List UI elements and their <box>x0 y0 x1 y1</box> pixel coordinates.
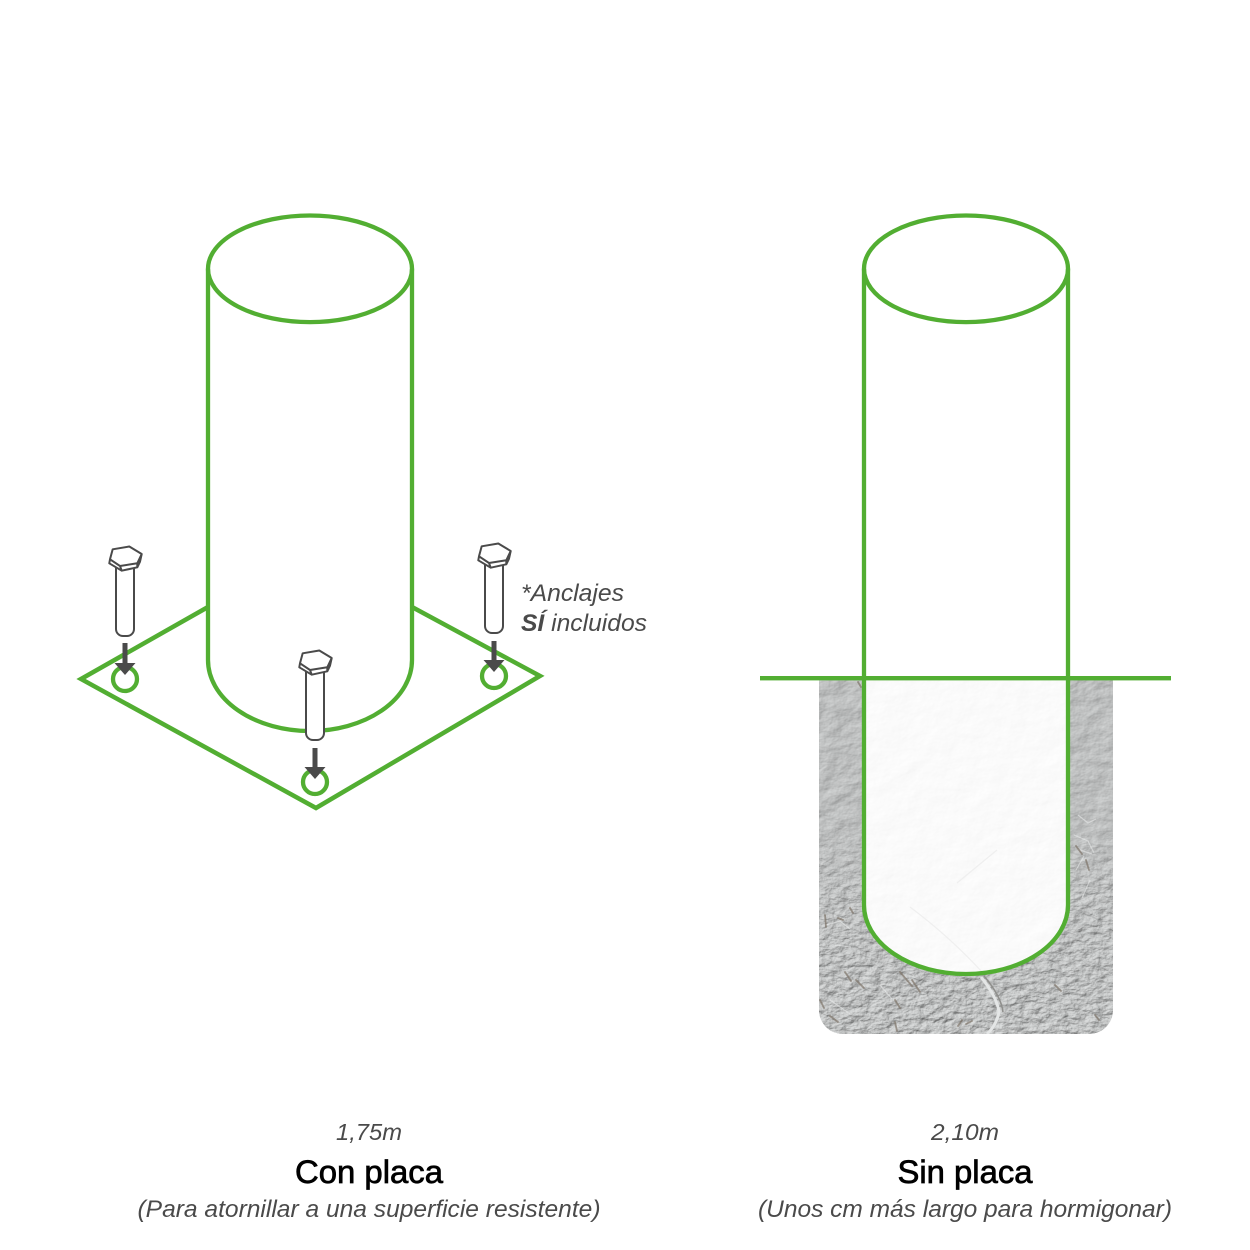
caption: con placa: 1,75m <box>336 1119 402 1145</box>
anchor hole: left <box>113 667 137 691</box>
caption: con placa: Con placa <box>295 1154 443 1190</box>
caption: con placa <box>138 1119 600 1223</box>
icon: bolt right <box>478 544 511 633</box>
caption: sin placa: Sin placa <box>898 1154 1033 1190</box>
caption: con placa: (Para atornillar a una superficie resistente) <box>138 1196 600 1223</box>
caption: sin placa: (Unos cm más largo para hormigonar) <box>758 1196 1172 1223</box>
icon: bolt left <box>109 546 142 636</box>
panel: sin placa <box>760 215 1171 1036</box>
arrow: centre <box>304 748 326 779</box>
anchor hole: right <box>482 664 506 688</box>
anchor hole: centre <box>303 770 327 794</box>
base plate <box>81 607 540 808</box>
note: anclajes <box>521 580 647 637</box>
panel: con placa <box>81 215 647 808</box>
caption: sin placa: 2,10m <box>930 1119 999 1145</box>
note: anclajes: SÍ incluidos <box>521 609 647 637</box>
arrow: right <box>484 641 504 672</box>
caption: sin placa <box>758 1119 1172 1223</box>
icon: bolt centre <box>299 650 332 740</box>
note: anclajes: *Anclajes <box>521 580 624 607</box>
cylinder <box>208 215 412 731</box>
concrete pit <box>819 678 1113 1036</box>
ground line <box>760 676 1171 680</box>
arrow: left <box>114 643 136 675</box>
cylinder <box>864 215 1068 974</box>
white cylinder fill <box>860 678 1072 978</box>
